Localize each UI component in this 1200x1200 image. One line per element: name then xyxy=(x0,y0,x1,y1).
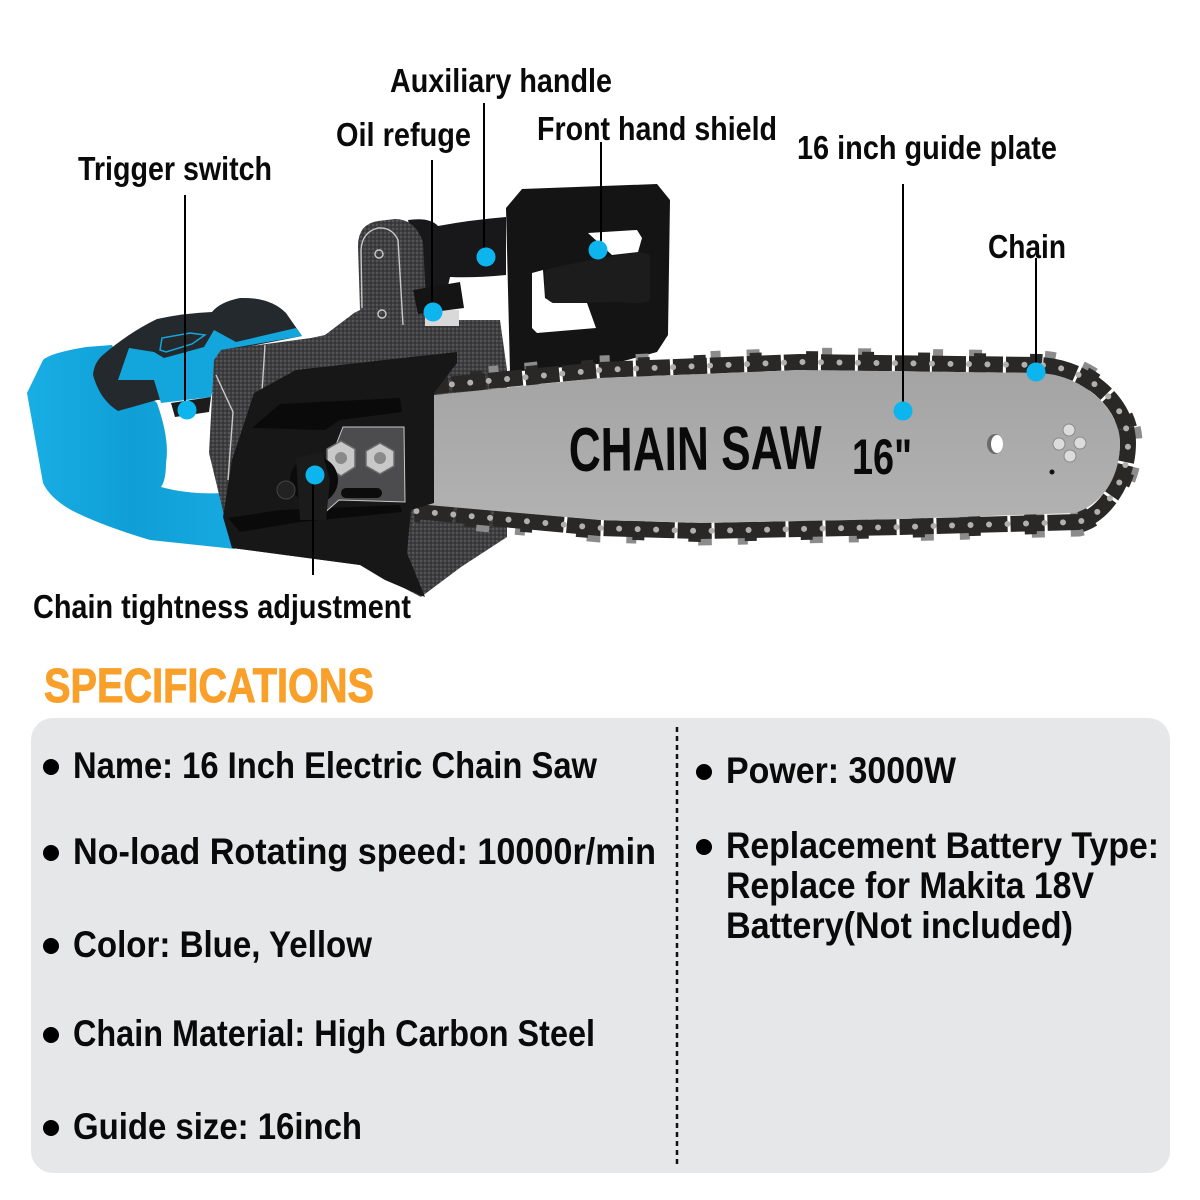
spec: color: Color: Blue, Yellow xyxy=(73,924,372,965)
bolt plate xyxy=(322,427,405,515)
oil cap xyxy=(413,282,464,326)
callout: chain tightness adjustment: Chain tightness adjustment xyxy=(33,588,411,625)
cover ridges xyxy=(228,398,402,532)
battery mount xyxy=(27,345,235,549)
bar text: chain saw: CHAIN SAW xyxy=(569,414,822,485)
bar text: 16 inch: 16" xyxy=(852,429,912,485)
heading: specifications: SPECIFICATIONS xyxy=(44,660,374,713)
callout: auxiliary handle: Auxiliary handle xyxy=(390,62,612,99)
chain saw illustration xyxy=(27,184,1128,597)
shield inner grip detail xyxy=(545,252,650,303)
chain xyxy=(415,362,1128,531)
callout: chain: Chain xyxy=(988,228,1066,265)
callout: trigger switch: Trigger switch xyxy=(78,150,272,187)
bolts xyxy=(327,441,394,476)
adjuster slot xyxy=(341,488,382,498)
spec: name: Name: 16 Inch Electric Chain Saw xyxy=(73,745,597,786)
callout: front hand shield xyxy=(537,110,777,260)
guide bar xyxy=(405,370,1120,523)
callout: oil refuge xyxy=(336,116,471,322)
auxiliary handle grip xyxy=(408,217,506,296)
spec: power: Power: 3000W xyxy=(726,750,956,791)
spec: replacement battery type: Replace for Makita 18V xyxy=(726,865,1094,906)
motor housing xyxy=(209,219,507,597)
chain tightness knob xyxy=(277,452,338,520)
callout: trigger switch xyxy=(78,150,272,420)
callout: chain tightness adjustment xyxy=(33,466,411,625)
spec: chain material: Chain Material: High Carbon Steel xyxy=(73,1013,595,1054)
callout: oil refuge: Oil refuge xyxy=(336,116,471,153)
spec: replacement battery type: Replacement Battery Type: xyxy=(726,825,1159,866)
trigger xyxy=(171,397,211,417)
rear handle shield xyxy=(506,184,670,372)
panel: specifications xyxy=(31,718,1170,1173)
sprocket rivets xyxy=(1050,424,1086,474)
callout: guide plate xyxy=(797,129,1057,420)
bar hole xyxy=(987,434,1003,454)
spec: replacement battery type xyxy=(696,825,1159,946)
chain cover xyxy=(223,352,457,597)
callout: chain xyxy=(988,228,1066,382)
spec: guide size: Guide size: 16inch xyxy=(73,1106,362,1147)
spec: replacement battery type: Battery(Not included) xyxy=(726,905,1073,946)
callout: front hand shield: Front hand shield xyxy=(537,110,777,147)
callout: guide plate: 16 inch guide plate xyxy=(797,129,1057,166)
spec: rotating speed: No-load Rotating speed: 10000r/min xyxy=(73,831,656,872)
rear grip xyxy=(93,298,302,411)
housing highlights xyxy=(216,228,403,480)
callout: auxiliary handle xyxy=(390,62,612,266)
